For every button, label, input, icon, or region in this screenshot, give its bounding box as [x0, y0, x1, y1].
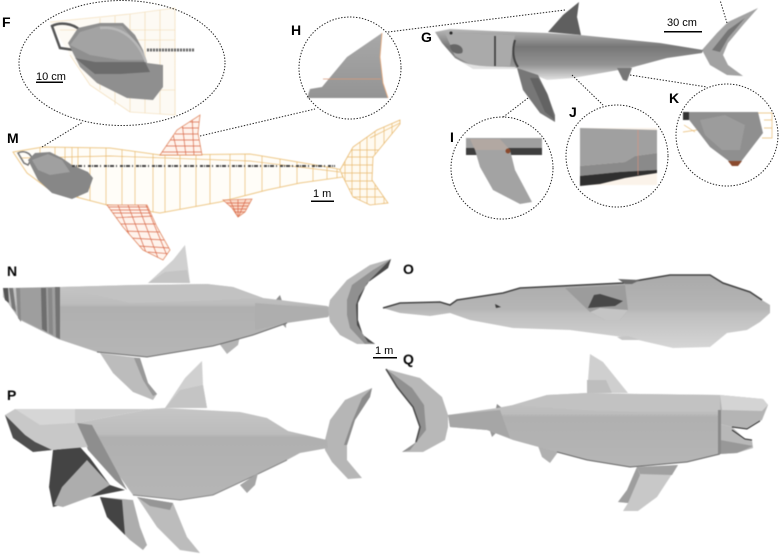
shark model [435, 2, 758, 122]
dotted circle [566, 105, 668, 207]
label H: H [291, 22, 301, 38]
body [3, 284, 332, 357]
connector: G tail upward [720, 0, 727, 23]
wireframe pelvic fin [222, 199, 252, 218]
skull render [52, 23, 195, 100]
scale bar 1 m centre: 1 m [375, 345, 393, 357]
belly section render [580, 128, 657, 186]
pectoral fin [100, 353, 157, 400]
vertebral column dots [72, 165, 335, 167]
panel H: dorsal fin inset [291, 17, 401, 119]
label K: K [669, 90, 679, 106]
panel O: solid model top view [383, 261, 770, 348]
label J: J [569, 104, 577, 120]
connector: M dorsal fin to H inset [200, 109, 315, 136]
front pectoral fin [137, 497, 200, 553]
pectoral fin [618, 465, 678, 511]
gill stripes [9, 287, 60, 339]
wireframe body [13, 140, 343, 215]
connector: G belly to J inset [572, 75, 603, 105]
panel P: open-mouth model side view [5, 361, 372, 553]
label P: P [7, 387, 16, 403]
scale bar 30 cm: 30 cm [667, 17, 697, 29]
tail fin [325, 388, 372, 479]
wireframe dorsal fin [160, 115, 205, 156]
open mouth dark interior [49, 447, 125, 507]
dotted inset circle [19, 0, 225, 126]
pelvic fin [538, 446, 558, 463]
panel F: skull detail inset [2, 0, 225, 126]
head and jaws [718, 395, 768, 454]
scale bar 1 m [311, 188, 334, 202]
body from above [383, 275, 770, 348]
pectoral fold [565, 285, 628, 320]
label I: I [450, 129, 454, 145]
panel Q: mirrored side view [386, 351, 768, 511]
dotted circle [676, 84, 778, 186]
caudal fins [274, 295, 282, 302]
wireframe pectoral fin [105, 205, 172, 260]
scale bar 30 cm [664, 17, 702, 32]
scale bar 10 cm: 10 cm [36, 71, 66, 83]
dotted circle [299, 17, 401, 119]
pelvic fin [218, 336, 240, 354]
connector: G pelvic to K inset [630, 75, 707, 87]
rear pectoral fin [100, 497, 147, 550]
pectoral fin render [466, 138, 542, 204]
label G: G [421, 29, 432, 45]
tail fin [386, 369, 448, 452]
body [77, 408, 328, 500]
connector: M skull to F inset [42, 122, 83, 147]
scale bar 1 m centre [373, 345, 397, 358]
panel J: belly inset [566, 104, 668, 207]
small fins [496, 404, 502, 408]
connector: H inset to G dorsal fin [388, 10, 565, 32]
dorsal fin [587, 354, 628, 393]
connector: G pectoral to I inset [502, 98, 528, 118]
upper head [5, 409, 150, 452]
body [448, 393, 720, 467]
label Q: Q [403, 351, 414, 367]
dotted circle [451, 117, 553, 219]
panel K: pelvic fin inset [669, 84, 778, 186]
panel I: pectoral fin inset [450, 117, 553, 219]
pelvic fin render [683, 112, 772, 166]
tail fin [328, 259, 391, 344]
wireframe backdrop [50, 8, 176, 115]
skull inside wireframe [18, 152, 93, 199]
panel M: wireframe shark [7, 115, 402, 260]
label O: O [403, 261, 414, 277]
panel N: solid model side view [3, 245, 391, 400]
label N: N [7, 263, 17, 279]
label M: M [7, 130, 19, 146]
dorsal fin [148, 245, 190, 283]
dorsal fin render [307, 33, 388, 98]
label F: F [2, 14, 11, 30]
panel G: photographic shark model [421, 2, 758, 122]
wireframe tail fin [340, 118, 402, 210]
lower jaw [54, 460, 110, 507]
dorsal fin [165, 361, 207, 408]
scale bar 1 m: 1 m [313, 188, 331, 200]
